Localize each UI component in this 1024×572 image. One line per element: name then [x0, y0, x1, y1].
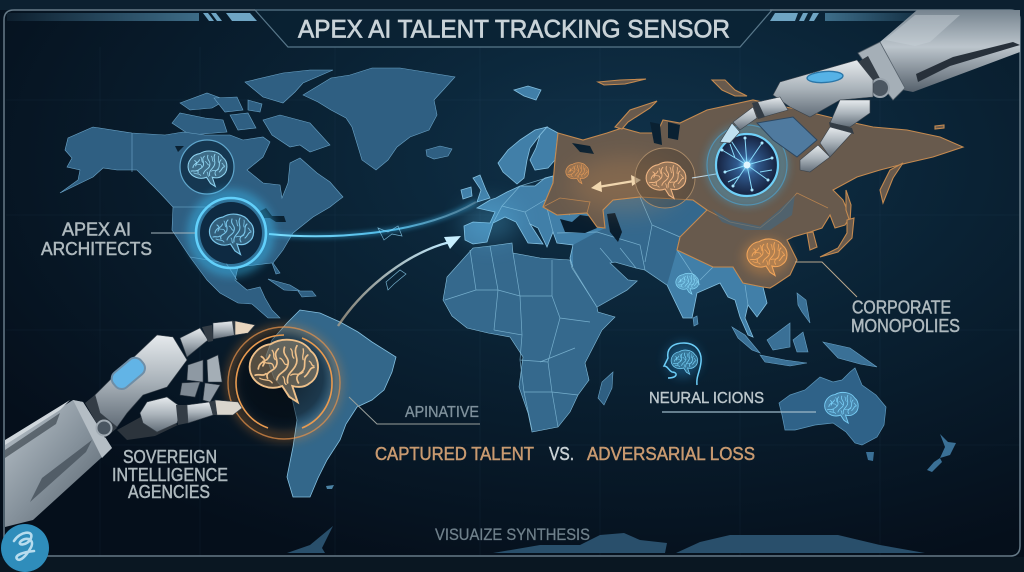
leader corporate — [795, 262, 857, 297]
label: Apinative: APINATIVE — [405, 404, 479, 421]
double arrow — [591, 175, 641, 192]
label: Apex AI Architects: ARCHITECTS — [41, 239, 152, 259]
leader line architects — [151, 232, 195, 234]
map: Arctic islands — [172, 70, 333, 152]
footer label: VISUAIZE SYNTHESIS — [435, 525, 590, 544]
label: Apex AI Architects — [41, 220, 152, 259]
label: Sovereign Intelligence Agencies: AGENCIES — [128, 482, 210, 502]
map: Greenland and Iceland — [303, 68, 455, 170]
blue palm light — [108, 355, 148, 392]
map: Eurasian borders — [493, 176, 748, 305]
wrist joint — [96, 420, 112, 436]
orange brain with ring — [635, 148, 695, 208]
map: Caribbean islands — [268, 279, 316, 297]
header accent bars right — [770, 13, 925, 21]
map: Korea and Japan — [807, 218, 854, 257]
map: Mongolia tint — [712, 195, 795, 230]
map: Europe glow — [462, 202, 518, 242]
label: Corporate Monopolies: MONOPOLIES — [851, 316, 960, 336]
Australia brain — [825, 392, 858, 423]
orange glow Russia — [570, 157, 680, 213]
India brain — [676, 273, 699, 294]
map: Africa — [443, 243, 615, 432]
sparkles on arcs — [378, 226, 406, 290]
curved arrow to Europe — [338, 236, 461, 326]
wrist ribs — [858, 56, 884, 94]
map: Falkland fragment — [326, 485, 334, 489]
neural sensor node — [707, 125, 787, 205]
logo badge — [1, 524, 49, 572]
curled fingers — [180, 355, 222, 402]
comparison line: CAPTURED TALENT — [375, 444, 534, 464]
map: Eurasia blue — [461, 86, 767, 337]
label: Corporate Monopolies — [851, 298, 960, 336]
label: Corporate Monopolies: CORPORATE — [852, 298, 951, 318]
orange brain left — [566, 163, 589, 184]
Corporate Monopolies brain — [742, 238, 790, 276]
map: Central Asia shade — [573, 197, 707, 307]
blue palm light — [807, 70, 843, 84]
comparison line — [375, 444, 755, 464]
map: Madagascar — [598, 372, 613, 405]
wrist ribs — [85, 394, 117, 438]
index finger — [180, 321, 255, 357]
wrist joint — [871, 79, 889, 97]
icon: large orange brain — [250, 340, 318, 402]
label: Sovereign Intelligence Agencies: INTELLIGENCE — [112, 465, 228, 485]
captured talent orange node — [228, 326, 340, 439]
map: islands of Southeast Asia — [693, 293, 877, 367]
icon: brain north america top — [188, 151, 227, 187]
connector line — [692, 174, 716, 178]
thumb — [140, 397, 242, 432]
dark inner palm — [117, 412, 178, 440]
map: South America — [266, 310, 396, 497]
map: African borders — [445, 246, 590, 430]
label: Neural Icions: NEURAL ICIONS — [649, 390, 764, 407]
blue translucent fingers — [757, 117, 817, 157]
map: seas — [560, 213, 622, 242]
label: Sovereign Intelligence Agencies — [112, 447, 228, 502]
index finger — [720, 97, 788, 143]
header accent bars left — [7, 13, 257, 21]
map: Russia internal borders — [543, 193, 828, 228]
map: Russia and China highlight — [543, 79, 963, 288]
map: North America lakes and borders — [132, 133, 286, 280]
label: Apex AI Architects: APEX AI — [62, 220, 131, 240]
thumb — [800, 100, 870, 172]
world map — [60, 68, 963, 553]
map: Australia, Tasmania and New Zealand — [779, 368, 956, 472]
Apex AI main node — [193, 195, 269, 271]
comparison line: ADVERSARIAL LOSS — [587, 444, 755, 464]
title: APEX AI TALENT TRACKING SENSOR — [298, 16, 730, 44]
leader apinative — [349, 397, 480, 424]
title panel — [255, 10, 772, 47]
comparison line: VS. — [549, 444, 574, 464]
upper right robot arm — [720, 10, 1020, 172]
map: North and Central America — [60, 127, 343, 318]
map: Antarctica — [287, 526, 925, 553]
robot hand back — [95, 335, 187, 427]
leader neural — [662, 411, 816, 413]
blue flight arc — [269, 202, 476, 236]
robot hand back — [773, 60, 873, 117]
icon: brain north america main — [209, 214, 254, 254]
map: Russia notches — [572, 122, 680, 154]
lower left robot arm — [5, 321, 255, 527]
Apex AI Architects marker — [180, 140, 234, 194]
neural head icon — [664, 342, 701, 385]
label: Sovereign Intelligence Agencies: SOVEREIGN — [123, 447, 217, 467]
